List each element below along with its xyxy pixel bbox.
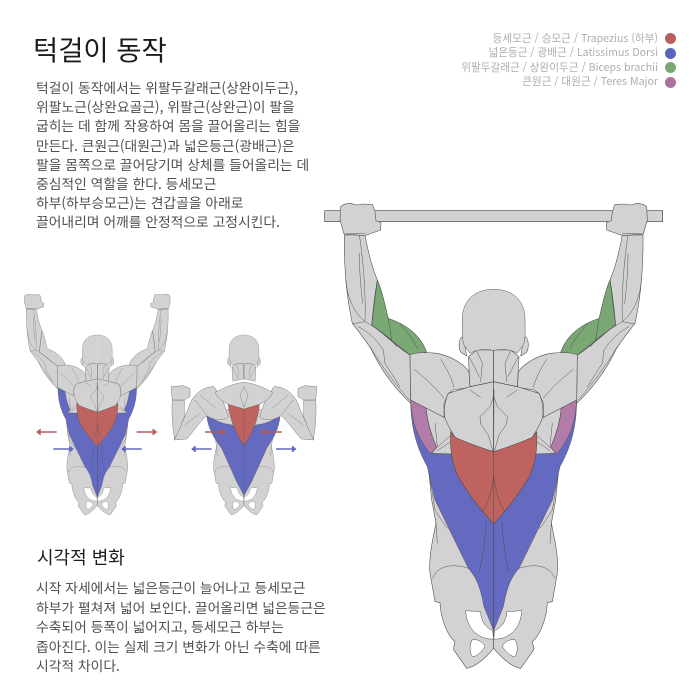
biceps left	[372, 280, 427, 355]
infraspinatus region	[426, 407, 561, 454]
red arrow: left figure right	[137, 429, 156, 435]
text block: visual change: 시작 자세에서는 넓은등근이 늘어나고 등세모근	[36, 577, 305, 597]
section heading: 시각적 변화	[37, 544, 125, 570]
head and neck	[228, 335, 260, 381]
text block: exercise description: 만든다. 큰원근(대원근)과 넓은등근(광배근)은	[36, 135, 295, 155]
text block: visual change	[36, 577, 326, 675]
lower trapezius	[450, 432, 537, 524]
lower trapezius contracted	[228, 404, 259, 446]
blue arrow: left figure inward left	[53, 446, 73, 452]
legend label: biceps: 위팔두갈래근 / 상완이두근 / Biceps brachii	[461, 60, 658, 74]
text block: exercise description: 중심적인 역할을 한다. 등세모근	[36, 173, 216, 193]
latissimus dorsi	[58, 388, 137, 497]
biceps right	[561, 280, 616, 355]
left arm	[171, 386, 228, 440]
upper arm muscle left	[39, 331, 65, 366]
head and neck	[459, 289, 528, 387]
legend	[461, 30, 676, 89]
teres major left	[411, 400, 437, 454]
right arm	[260, 386, 317, 440]
red arrow: right figure inward right	[262, 429, 282, 435]
spine lines	[240, 387, 248, 496]
torso and pelvis	[62, 410, 132, 515]
legend dot: biceps	[665, 62, 676, 73]
torso and pelvis	[420, 447, 567, 668]
small figure: arms lowered, contracted position	[171, 335, 317, 515]
text block: visual change: 시각적 차이다.	[36, 655, 120, 675]
text block: visual change: 좁아진다. 이는 실제 크기 변화가 아닌 수축에 따른	[36, 636, 321, 656]
blue arrow: left figure inward right	[122, 446, 142, 452]
text block: exercise description: 끌어내리며 어깨를 안정적으로 고정시킨다.	[36, 211, 280, 231]
small figure: arms raised, start position	[24, 294, 170, 515]
text block: exercise description: 위팔노근(상완요골근), 위팔근(상완근)이 팔을	[36, 96, 295, 116]
text block: visual change: 하부가 펼쳐져 넓어 보인다. 끌어올리면 넓은등근은	[36, 596, 326, 616]
contracted muscles and arms	[171, 382, 317, 496]
legend dot: latissimus	[665, 48, 676, 58]
latissimus dorsi	[411, 400, 577, 631]
infraspinatus region	[65, 391, 129, 413]
text block: exercise description: 하부(하부승모근)는 견갑골을 아래로	[36, 192, 243, 212]
blue arrow: right figure outward right	[276, 446, 295, 452]
blue arrow: right figure outward left	[192, 446, 212, 452]
upper trapezius	[215, 382, 273, 409]
title: 턱걸이 동작	[33, 28, 167, 68]
legend label: latissimus: 넓은등근 / 광배근 / Latissimus Dorsi	[488, 45, 658, 60]
legend dot: trapezius	[665, 33, 676, 44]
torso and pelvis	[209, 410, 279, 515]
teres major right	[551, 400, 577, 454]
arrows showing width change	[37, 429, 295, 452]
text block: visual change: 수축되어 등폭이 넓어지고, 등세모근 하부는	[36, 616, 284, 636]
main figure: hanging pull-up position	[325, 203, 663, 668]
arms, shoulders and upper back	[340, 203, 647, 452]
legend label: teres major: 큰원근 / 대원근 / Teres Major	[522, 74, 658, 89]
arms, shoulders and upper back	[24, 294, 170, 412]
pull-up bar	[325, 211, 663, 222]
text block: exercise description	[36, 77, 309, 231]
upper arm muscle right	[129, 331, 155, 366]
red arrow: left figure left	[37, 429, 57, 435]
head and neck	[81, 335, 114, 381]
text block: exercise description: 굽히는 데 함께 작용하여 몸을 끌어올리는 힘을	[36, 115, 300, 135]
legend dot: teres major	[665, 76, 676, 88]
text block: exercise description: 팔을 몸쪽으로 끌어당기며 상체를 들어올리는 데	[36, 154, 309, 174]
lower trapezius	[77, 403, 118, 447]
latissimus dorsi contracted	[207, 416, 280, 496]
legend label: trapezius: 등세모근 / 승모근 / Trapezius (하부)	[493, 30, 658, 46]
red arrow: right figure inward left	[205, 429, 225, 435]
text block: exercise description: 턱걸이 동작에서는 위팔두갈래근(상완이두근),	[36, 77, 298, 97]
